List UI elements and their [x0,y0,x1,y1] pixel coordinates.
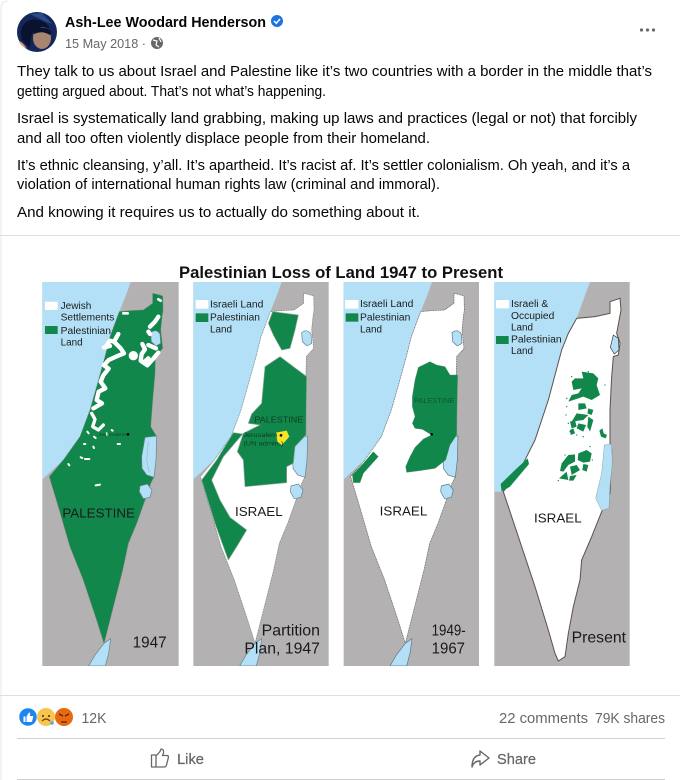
infographic title: Palestinian Loss of Land 1947 to Present [179,264,504,282]
area labels: PALESTINE [254,415,304,425]
legend: Israeli & [511,299,549,310]
legend: Palestinian [61,326,111,337]
panel: partition plan map [181,282,329,666]
Palestinian enclaves [501,372,607,492]
icon: globe [151,37,163,49]
reaction count: 12K [82,711,107,727]
panel: 1949-1967 map [331,282,479,666]
legend: Israeli Land [210,300,263,311]
share label: Share [497,751,536,768]
Jerusalem label [98,432,129,437]
area label: ISRAEL [534,511,582,526]
year label [244,623,320,657]
post text: and all too often violently displace people from their homeland. [17,131,430,147]
post text: And knowing it requires us to actually do something about it. [17,205,420,221]
Jerusalem UN zone: Jerusalem [243,432,277,439]
legend: Palestinian [360,313,410,324]
year label: 1949- [432,622,466,639]
legend: Land [511,346,533,357]
action bar [152,749,536,768]
legend: Land [360,324,382,335]
post text: Israel is systematically land grabbing, making up laws and practices (legal or not) that forcibly [17,111,638,127]
more options menu [640,28,655,32]
year label: Plan, 1947 [244,640,320,657]
post text: They talk to us about Israel and Palestine like it’s two countries with a border in the middle that’s [17,64,652,80]
Palestinian areas [352,362,458,483]
legend: Land [511,323,533,334]
infographic image [30,264,630,666]
reactions row [19,708,665,727]
year label: Partition [262,623,320,640]
legend: Jewish [61,301,91,312]
legend [45,301,114,349]
comments and shares count [499,711,665,727]
panel: present map [494,282,630,666]
post date: 15 May 2018 · [65,37,146,51]
legend: Settlements [61,313,114,324]
verified badge [271,15,283,27]
settlements [68,299,161,485]
legend: Palestinian [511,334,562,345]
icon: angry reaction [55,708,73,726]
Jerusalem label: Jerusalem [98,432,127,437]
icon: like [152,749,168,767]
country label: PALESTINE [62,505,135,520]
year label: 1967 [432,640,465,657]
legend: Land [61,338,83,349]
panel: 1947 map [30,282,179,666]
Palestinian areas [202,312,307,560]
legend: Israeli Land [360,299,413,310]
year label: 1947 [133,635,167,652]
like label: Like [177,751,204,768]
post text: violation of international human rights law (criminal and immoral). [17,177,440,193]
area labels: PALESTINE [414,396,454,405]
Jerusalem UN zone: (UN admin.) [243,442,283,448]
legend: Occupied [511,311,554,322]
icon: share [472,751,489,767]
panel: partition plan map: ISRAEL [235,504,283,519]
avatar [17,12,57,52]
enclave speckles [558,371,606,481]
legend [196,300,263,335]
legend [345,299,413,335]
author name: Ash-Lee Woodard Henderson [65,14,266,31]
Jerusalem UN zone [243,431,289,448]
post text [17,64,652,221]
legend: Land [210,324,232,335]
post text: It’s ethnic cleansing, y’all. It’s apartheid. It’s racist af. It’s settler colonialism. Oh yeah, and it’s a [17,158,630,174]
year label: Present [572,630,627,647]
post header [17,12,655,52]
panel: 1949-1967 map: ISRAEL [380,503,427,518]
legend: Palestinian [210,313,260,324]
year label [432,622,466,657]
comments and shares count: 79K shares [595,711,665,727]
icon: sad reaction [37,708,55,726]
post text: getting argued about. That’s not what’s happening. [17,84,326,100]
legend [496,299,562,357]
comments and shares count: 22 comments [499,711,588,727]
icon: like reaction [19,708,37,726]
